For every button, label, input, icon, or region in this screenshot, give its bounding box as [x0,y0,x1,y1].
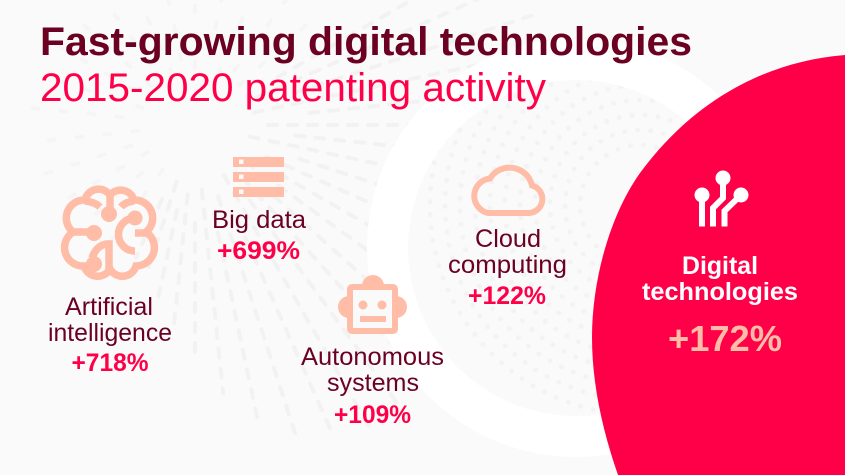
label: autonomous systems: systems [327,369,419,397]
icon: cloud [474,168,542,213]
label: artificial intelligence [48,293,172,377]
label: artificial intelligence: intelligence [48,319,172,347]
icon: digital circuit [694,170,748,226]
white ring [367,39,785,457]
icon: robot [338,275,407,331]
label: cloud computing: +122% [468,282,546,310]
label: autonomous systems: Autonomous [301,343,444,371]
title: Fast-growing digital technologies [40,20,692,64]
label: digital technologies [642,252,798,359]
label: autonomous systems [301,343,444,429]
label: cloud computing: computing [448,251,567,279]
icon: big data server [233,157,284,197]
label: artificial intelligence: Artificial [65,293,153,321]
label: big data: Big data [212,206,306,234]
title: 2015-2020 patenting activity [40,66,546,110]
label: big data: +699% [217,237,300,265]
red panel: digital technologies [592,55,845,475]
label: big data [212,206,306,265]
title [40,20,692,110]
label: digital technologies: technologies [642,278,798,306]
label: digital technologies: Digital [682,252,758,280]
icon: brain [65,189,154,276]
label: cloud computing: Cloud [475,225,541,253]
label: digital technologies: +172% [668,318,782,359]
label: artificial intelligence: +718% [72,349,148,377]
label: cloud computing [448,225,567,310]
label: autonomous systems: +109% [334,401,411,429]
inner disc [408,80,744,416]
